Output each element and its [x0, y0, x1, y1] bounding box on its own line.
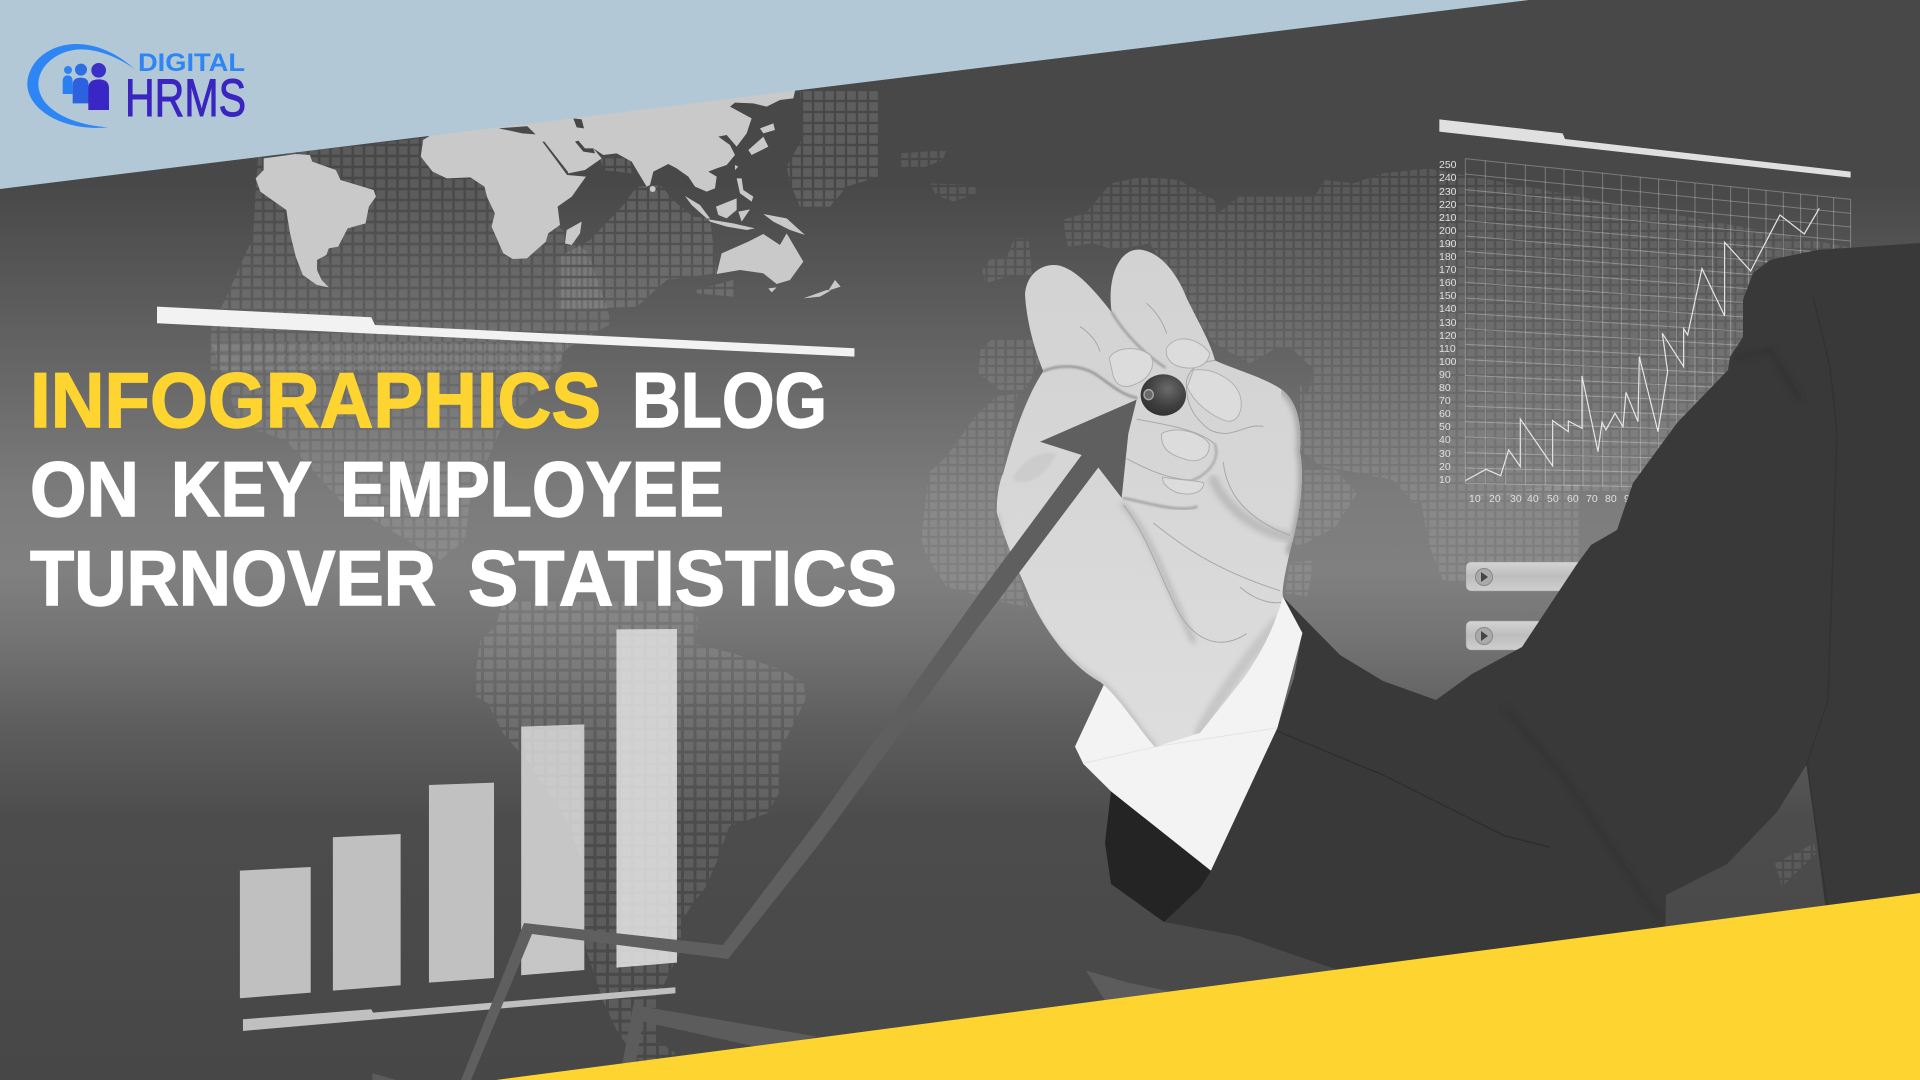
- dotted map region, Pacific and Indian Ocean: [560, 90, 880, 310]
- hand holding pen: [980, 250, 1302, 747]
- bar 4: [521, 724, 584, 975]
- y axis labels: 210: [1439, 212, 1457, 224]
- world map: left dotted map and continents: [210, 70, 880, 1063]
- title line 3: TURNOVER: [30, 534, 436, 622]
- button 2: [1466, 621, 1551, 650]
- sleeve shading and folds: [1277, 297, 1837, 920]
- logo: Digital HRMS: [27, 44, 246, 128]
- top rule, right: [1439, 119, 1851, 178]
- y axis labels: 190: [1439, 238, 1457, 250]
- fingernails: [1109, 339, 1241, 494]
- arrow head over fingers: [980, 400, 1137, 625]
- y axis labels: 160: [1439, 277, 1457, 289]
- y axis labels: 110: [1439, 343, 1456, 355]
- x axis labels: 50: [1547, 493, 1559, 505]
- pen tip: [1141, 374, 1186, 416]
- logo crescent: [27, 44, 135, 128]
- title line 1: BLOG: [632, 356, 827, 444]
- x axis labels: 80: [1605, 493, 1617, 505]
- y axis labels: 170: [1439, 264, 1457, 276]
- shirt cuff: [1075, 597, 1302, 871]
- y axis labels: 180: [1439, 251, 1457, 263]
- logo people icon: [63, 63, 109, 110]
- y axis labels: 220: [1439, 199, 1457, 211]
- hand silhouette: [996, 250, 1302, 746]
- knuckle hair texture: [1014, 454, 1054, 481]
- continents: Asia and Oceania: [470, 70, 841, 298]
- y axis labels: 80: [1439, 382, 1451, 394]
- x axis labels: 60: [1567, 493, 1579, 505]
- continents: Americas and Africa: [256, 110, 586, 287]
- y axis labels: 50: [1439, 421, 1451, 433]
- y axis labels: 230: [1439, 186, 1457, 198]
- y axis labels: 240: [1439, 172, 1457, 184]
- y axis labels: 140: [1439, 303, 1457, 315]
- media buttons: [1466, 562, 1586, 650]
- y axis labels: 20: [1439, 461, 1451, 473]
- logo wordmark HRMS: HRMS: [125, 69, 246, 128]
- blue corner panel: [0, 0, 1529, 189]
- logo wordmark DIGITAL: DIGITAL: [138, 49, 245, 77]
- y axis labels: 130: [1439, 317, 1457, 329]
- y axis labels: 30: [1439, 448, 1451, 460]
- suit jacket: [1105, 243, 1920, 1000]
- x axis labels: 10: [1469, 493, 1481, 505]
- title line 2: KEY: [171, 445, 312, 533]
- dotted map region, Atlantic: [211, 123, 612, 370]
- title line 3: [30, 534, 897, 622]
- y axis labels: 120: [1439, 330, 1457, 342]
- yellow corner panel: [496, 893, 1920, 1080]
- finger creases: [1080, 303, 1290, 642]
- line chart panel: [1439, 119, 1851, 505]
- x axis labels: 90: [1624, 493, 1636, 505]
- x axis labels: 40: [1527, 493, 1539, 505]
- x axis labels: [1469, 493, 1636, 505]
- dotted map region, behind title: [210, 340, 570, 560]
- chart line: [1465, 208, 1819, 481]
- x axis labels: 20: [1489, 493, 1501, 505]
- y axis labels: 40: [1439, 434, 1451, 446]
- y axis labels: 150: [1439, 290, 1457, 302]
- title line 1: INFOGRAPHICS: [30, 356, 601, 444]
- y axis labels: 90: [1439, 369, 1451, 381]
- y axis labels: 250: [1439, 159, 1457, 171]
- lower arrow fragments: [372, 970, 1169, 1080]
- x axis labels: 30: [1510, 493, 1522, 505]
- title line 3: STATISTICS: [468, 534, 897, 622]
- x axis labels: 70: [1586, 493, 1598, 505]
- y axis labels: [1439, 159, 1457, 486]
- title: [30, 356, 897, 622]
- world map: right dotted map: [900, 150, 1864, 887]
- rising arrow: [461, 400, 1137, 1080]
- y axis labels: 70: [1439, 395, 1451, 407]
- bar chart: [240, 629, 677, 1031]
- y axis labels: 10: [1439, 474, 1451, 486]
- top white rule, left: [157, 307, 854, 357]
- bar chart baseline: [243, 987, 675, 1031]
- bar 5: [616, 629, 677, 968]
- y axis labels: 60: [1439, 408, 1451, 420]
- button 1: [1466, 562, 1586, 591]
- hand shading: [997, 312, 1302, 747]
- dark sleeve lining: [1105, 791, 1211, 922]
- bar 3: [429, 783, 494, 983]
- chart grid: [1465, 159, 1851, 491]
- y axis labels: 100: [1439, 356, 1457, 368]
- title line 2: [30, 445, 724, 533]
- bar 2: [333, 834, 401, 991]
- y axis labels: 200: [1439, 225, 1457, 237]
- bar 1: [240, 867, 311, 998]
- title line 2: ON: [30, 445, 139, 533]
- title line 2: EMPLOYEE: [340, 445, 724, 533]
- dotted map region, behind bars: [476, 600, 806, 1063]
